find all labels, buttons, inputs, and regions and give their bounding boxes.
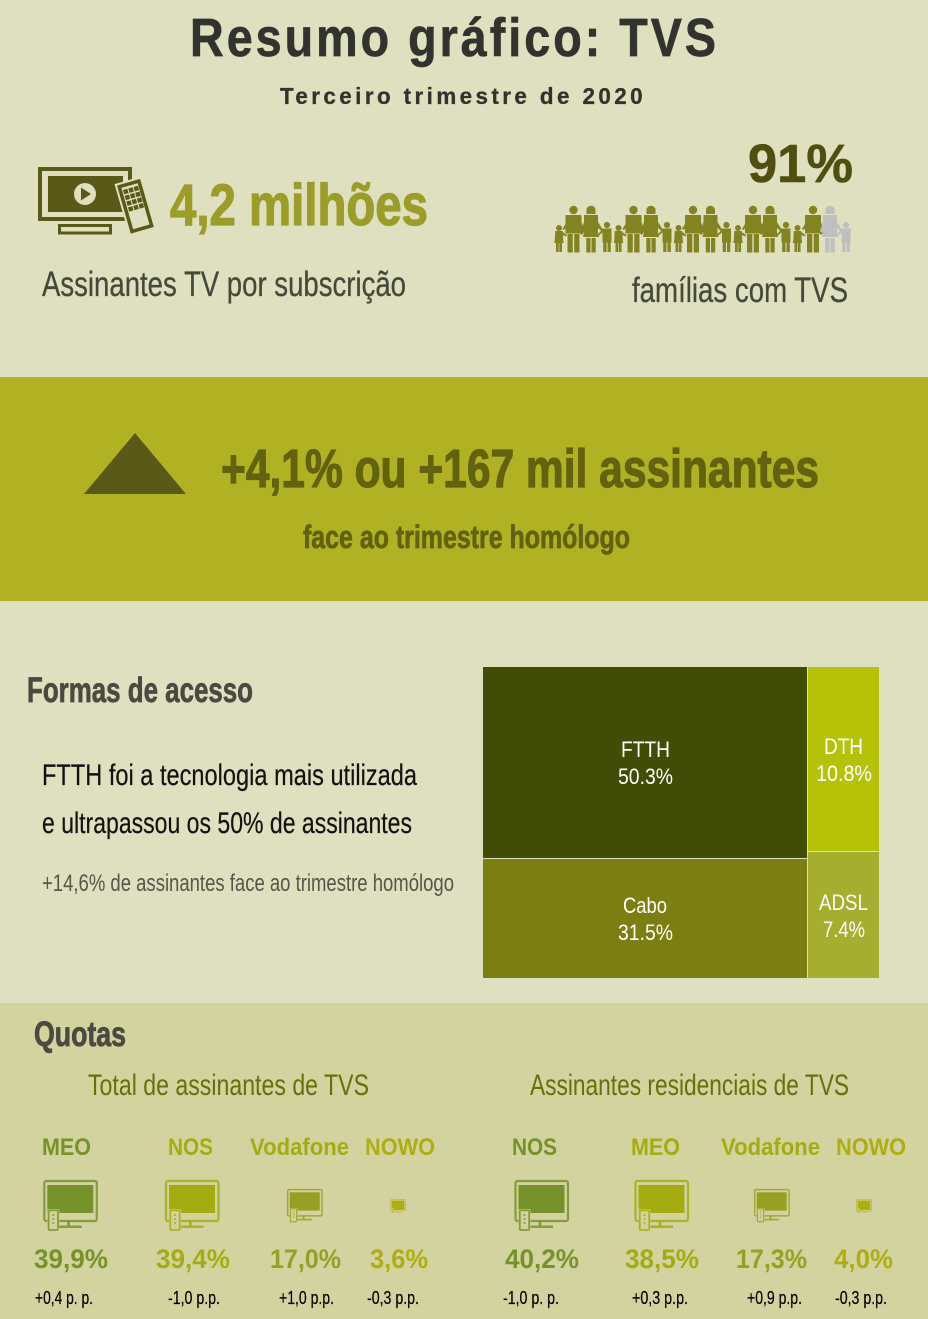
big number: households: 91% xyxy=(748,134,853,194)
panel: growth band xyxy=(0,377,928,601)
subpanel: total subscribers xyxy=(34,1069,435,1308)
icon: row of families xyxy=(554,206,850,252)
treemap cell: FTTH xyxy=(483,667,807,858)
share: MEO residential: MEO xyxy=(631,1134,680,1161)
share: MEO residential: +0,3 p.p. xyxy=(632,1288,688,1308)
panel: market shares xyxy=(0,1003,928,1319)
share: Vodafone total xyxy=(250,1134,349,1308)
subheading: total: Total de assinantes de TVS xyxy=(88,1069,369,1102)
treemap chart xyxy=(483,667,879,978)
icon: television and remote xyxy=(40,169,156,236)
share: Vodafone residential xyxy=(721,1134,820,1308)
text block: FTTH growth: +14,6% de assinantes face ao trimestre homólogo xyxy=(42,870,454,897)
growth subtitle: face ao trimestre homólogo xyxy=(303,519,630,555)
share: NOS residential: -1,0 p. p. xyxy=(503,1288,559,1308)
share: MEO residential xyxy=(625,1134,699,1308)
share: NOWO total: -0,3 p.p. xyxy=(367,1288,419,1308)
big number: subscribers: 4,2 milhões xyxy=(170,173,428,238)
share: NOWO residential xyxy=(834,1134,906,1308)
subpanel: residential subscribers xyxy=(503,1069,906,1308)
share: Vodafone total: +1,0 p.p. xyxy=(279,1288,334,1308)
share: MEO total: +0,4 p. p. xyxy=(35,1288,93,1308)
share: MEO total: 39,9% xyxy=(34,1244,108,1274)
share: MEO total xyxy=(34,1134,108,1308)
share: NOS residential xyxy=(503,1134,579,1308)
panel: access forms xyxy=(27,667,879,978)
treemap cell: Cabo xyxy=(483,859,807,978)
share: Vodafone residential: Vodafone xyxy=(721,1134,820,1161)
treemap cell: DTH: DTH xyxy=(824,734,863,759)
share: Vodafone residential: +0,9 p.p. xyxy=(747,1288,802,1308)
title: Resumo gráfico: TVS xyxy=(190,8,719,68)
text block: FTTH summary: FTTH foi a tecnologia mais utilizada xyxy=(42,759,417,792)
caption: households: famílias com TVS xyxy=(632,271,848,310)
share: NOWO total: 3,6% xyxy=(370,1244,428,1274)
heading: access forms: Formas de acesso xyxy=(27,671,253,710)
text block: FTTH summary: e ultrapassou os 50% de assinantes xyxy=(42,807,412,840)
share: Vodafone total: 17,0% xyxy=(270,1244,341,1274)
share: Vodafone total: Vodafone xyxy=(250,1134,349,1161)
treemap cell: DTH: 10.8% xyxy=(816,761,872,786)
share: NOS residential: 40,2% xyxy=(505,1244,579,1274)
treemap cell: ADSL: 7.4% xyxy=(823,917,865,942)
share: NOWO residential: 4,0% xyxy=(834,1244,893,1274)
treemap cell: ADSL: ADSL xyxy=(819,890,868,915)
share: NOS total: NOS xyxy=(168,1134,213,1161)
share: NOS total: 39,4% xyxy=(156,1244,230,1274)
share: NOS residential: NOS xyxy=(512,1134,557,1161)
caption: subscribers: Assinantes TV por subscrição xyxy=(42,265,406,304)
share: MEO total: MEO xyxy=(42,1134,91,1161)
text block: FTTH summary xyxy=(42,759,417,840)
panel: subscribers xyxy=(40,169,428,304)
treemap cell: FTTH: FTTH xyxy=(621,737,670,762)
share: NOS total: -1,0 p.p. xyxy=(168,1288,220,1308)
share: NOWO total: NOWO xyxy=(365,1134,435,1161)
treemap cell: FTTH: 50.3% xyxy=(618,764,673,789)
share: NOWO residential: NOWO xyxy=(836,1134,906,1161)
share: Vodafone residential: 17,3% xyxy=(736,1244,807,1274)
share: NOWO total xyxy=(365,1134,435,1308)
panel: households xyxy=(554,134,853,310)
treemap cell: Cabo: Cabo xyxy=(623,893,667,918)
share: MEO residential: 38,5% xyxy=(625,1244,699,1274)
subtitle: Terceiro trimestre de 2020 xyxy=(280,83,646,109)
icon: up triangle xyxy=(84,433,186,494)
heading: quotas: Quotas xyxy=(34,1015,126,1054)
share: NOWO residential: -0,3 p.p. xyxy=(835,1288,887,1308)
treemap cell: DTH xyxy=(808,667,879,851)
treemap cell: ADSL xyxy=(808,852,879,978)
share: NOS total xyxy=(156,1134,230,1308)
treemap cell: Cabo: 31.5% xyxy=(618,920,673,945)
